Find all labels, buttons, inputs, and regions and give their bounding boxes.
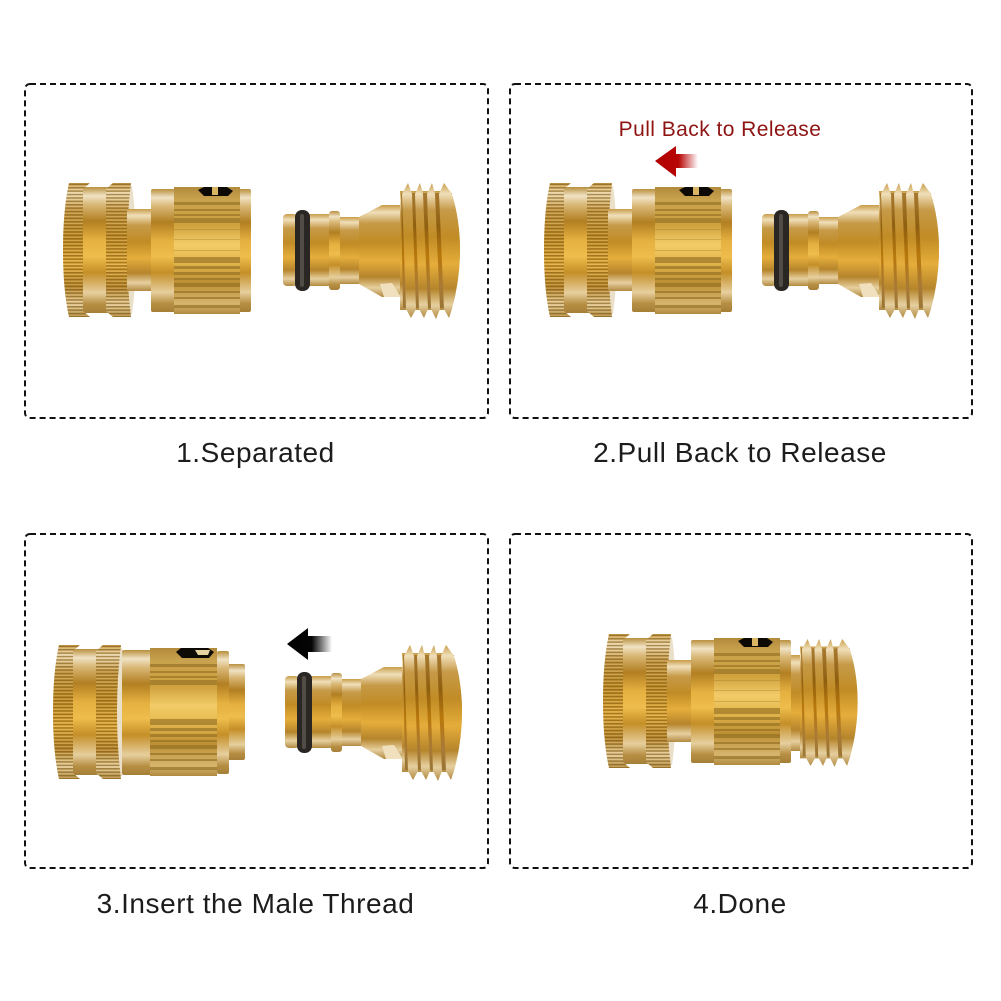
caption: step 3: 3.Insert the Male Thread <box>97 888 414 919</box>
panel: step 3 insert the male thread <box>25 534 488 868</box>
male thread connector <box>285 645 462 781</box>
female coupler <box>544 183 732 317</box>
caption: step 4: 4.Done <box>693 888 787 919</box>
female coupler, pulled sleeve <box>53 645 245 779</box>
arrow: red left <box>655 146 698 177</box>
caption: step 1: 1.Separated <box>176 437 335 468</box>
arrow: black left <box>287 628 332 660</box>
panel: step 1 separated <box>25 84 488 418</box>
connected assembly <box>603 634 858 768</box>
red annotation: Pull Back to Release <box>619 118 821 141</box>
female coupler <box>63 183 251 317</box>
caption: step 2: 2.Pull Back to Release <box>593 437 887 468</box>
male thread connector <box>283 183 460 319</box>
panel: step 2 pull back to release <box>510 84 972 418</box>
male thread connector <box>762 183 939 319</box>
panel: step 4 done <box>510 534 972 868</box>
